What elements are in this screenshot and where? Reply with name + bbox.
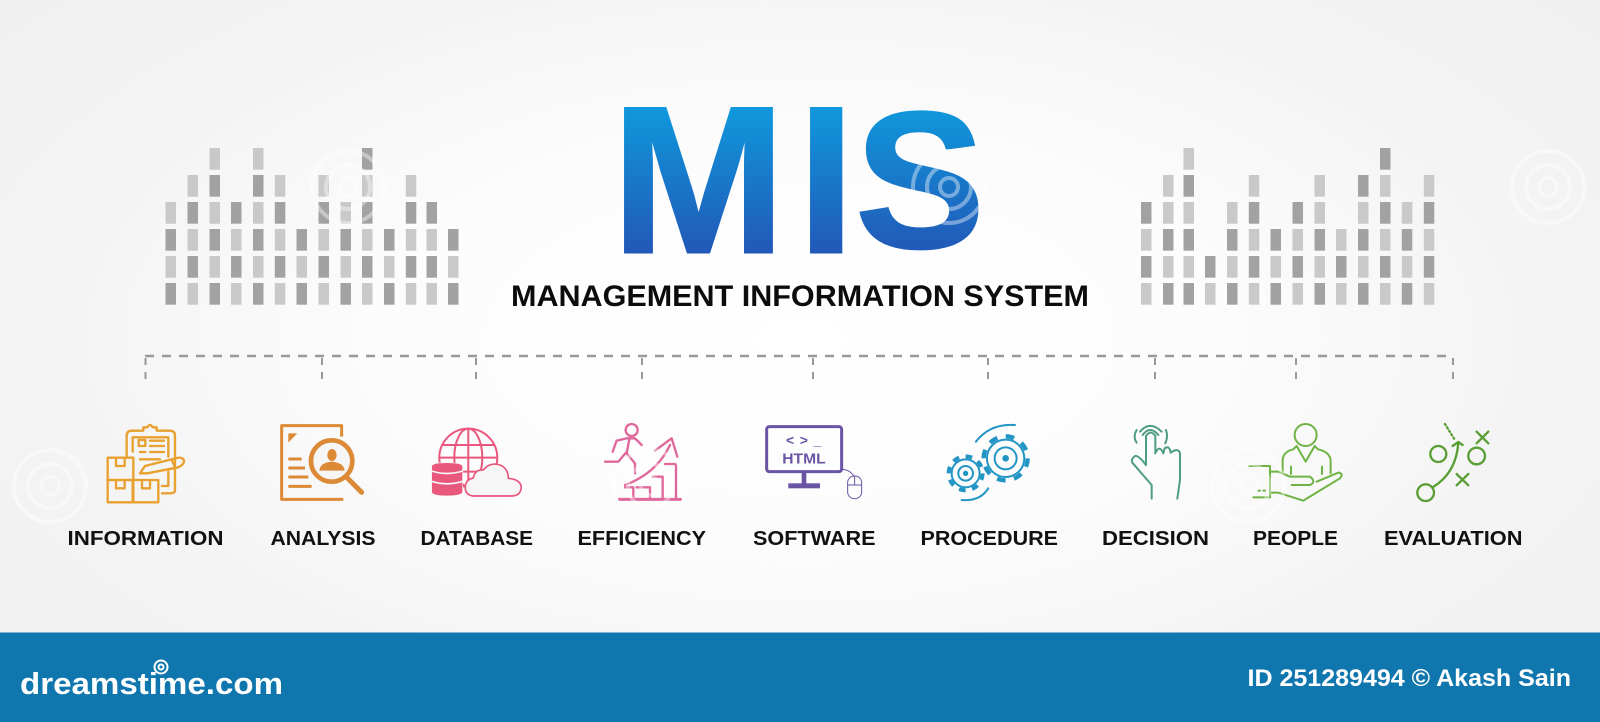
dashed connector tree [145, 356, 1454, 379]
title: MIS: S [855, 72, 985, 290]
label: INFORMATION [68, 528, 224, 550]
icon: database globe and cloud [432, 429, 521, 496]
footer credit: ID 251289494 © Akash Sain [1248, 665, 1571, 692]
left bar pattern [166, 148, 458, 305]
subtitle: MANAGEMENT INFORMATION SYSTEM [511, 280, 1089, 313]
icon: software monitor with HTML [767, 427, 862, 499]
icon glyph text: HTML: HTML [782, 450, 826, 467]
icon: people hand holding person [1249, 424, 1342, 501]
watermark spirals [14, 151, 1584, 522]
right bar pattern [1141, 148, 1434, 305]
label: DATABASE [420, 528, 533, 550]
footer logo text: dreamstime.com [20, 666, 283, 701]
icon: analysis document and magnifier [282, 426, 362, 499]
label: EFFICIENCY [578, 528, 707, 550]
footer banner [0, 632, 1600, 722]
icon: evaluation play diagram [1417, 424, 1488, 501]
icon: information clipboard and boxes [108, 425, 184, 502]
icon glyph text: prompt: <>_ [786, 432, 822, 448]
label: PEOPLE [1253, 528, 1338, 550]
icon: decision touch hand [1132, 426, 1180, 499]
label: EVALUATION [1384, 528, 1522, 550]
label: PROCEDURE [920, 528, 1058, 550]
footer logo spiral [154, 660, 168, 674]
title: MIS: MI [611, 62, 855, 298]
label: SOFTWARE [753, 528, 876, 550]
icon: efficiency runner and rising bars [605, 424, 681, 499]
icon: procedure gears [949, 425, 1028, 500]
label: DECISION [1102, 528, 1209, 550]
label: ANALYSIS [270, 528, 376, 550]
